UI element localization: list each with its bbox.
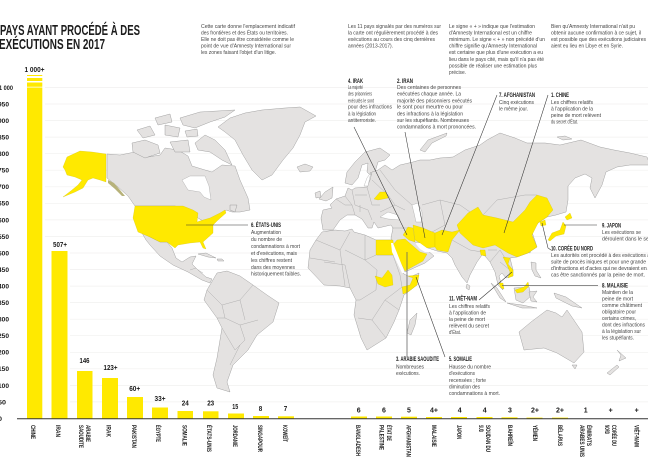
leader: 6 États-Unis [186,224,248,226]
text block: plus sign explanation: précise. [449,70,466,76]
chart: country labels: IRAK [105,425,111,438]
callout: 1 Chine: du secret d'État. [551,118,578,126]
chart: bar values: 507+ [53,242,67,249]
leader: 2 Iran [405,132,425,238]
callout: 11 Viêt-Nam: Les chiffres relatifs [449,304,490,310]
callout: 2 Iran: 2. IRAN [397,79,413,85]
callout: 5 Somalie: d'exécutions [449,371,475,377]
chart: bar values: 23 [207,401,214,408]
leader: 5 Somalie [416,277,445,357]
callout: 2 Iran: majorité des prisonniers exécutés [397,98,472,104]
callout: 11 Viêt-Nam: la peine de mort [449,317,486,323]
chart: bar values [24,67,639,415]
leader: 11 Viêt-Nam [479,272,512,300]
callout: 5 Somalie: recensées ; forte [449,378,486,384]
chart: country labels: IRAN [54,425,60,437]
bar: Égypte [152,408,168,418]
callout: 8 Malaisie: 8. MALAISIE [602,284,628,290]
chart: country labels: NORD [603,425,609,434]
callout: 10 Corée du Nord: suite de procès iniques et pour une grande [551,260,646,266]
bar: Bélarus [552,417,568,420]
bar: Soudan du Sud [476,417,492,418]
bar: Yémen [526,417,542,420]
bar: Bangladesh [351,416,367,418]
text block: Libya and Syria: aient eu lieu en Libye et en Syrie. [551,44,623,50]
callout: 6 États-Unis: condamnations à mort [251,244,301,250]
callout: 1 Chine: à l'application de la [551,106,593,112]
callout: 8 Malaisie: obligatoire pour [602,310,636,316]
callout: 8 Malaisie: à la législation sur [602,329,641,335]
callout: 5 Somalie: condamnations à mort. [449,391,500,397]
callout: 1 Chine: peine de mort relèvent [551,113,602,119]
callout: 7 Afghanistan: 7. AFGHANISTAN [499,93,535,99]
chart: bar values: 7 [284,406,287,413]
text block: Libya and Syria: Bien qu'Amnesty International n'ait pu [551,24,635,30]
text block: plus sign explanation: est certaine que plus d'une exécution a eu [449,50,543,56]
chart: bar values: 33+ [154,396,166,403]
bar: Pakistan [127,397,143,418]
callout: 6 États-Unis [251,221,301,278]
callout: 5 Somalie: 5. SOMALIE [449,357,472,363]
text block: plus sign explanation: Le signe « + » indique que l'estimation [449,24,535,30]
callout: 11 Viêt-Nam: à l'application de [449,311,486,317]
chart: bar values: 123+ [104,365,118,372]
chart: bar values: 6 [357,408,361,415]
callout: 6 États-Unis: les chiffres restent [251,258,293,264]
yellow countries [63,151,572,294]
bar: Chine [27,75,42,418]
chart: bar values: + [609,408,613,415]
callout: 9 Japon [602,224,648,242]
callout: 9 Japon: Les exécutions se [602,230,641,236]
chart: bar values: 6 [382,408,386,415]
leader: 1 Chine [504,95,548,233]
callout: 4 Irak: antiterroriste. [348,118,376,124]
chart: bar values: 3 [508,408,512,415]
chart: bar values: 15 [232,404,238,411]
title [0,22,140,53]
callout: 7 Afghanistan [499,93,535,112]
country: Bélarus [374,192,388,200]
callout: 4 Irak: pour des infractions [348,105,392,111]
text block: Libya and Syria: est possible que des exécutions judiciaires [551,37,646,43]
callout: 2 Iran [397,79,476,130]
title: EXÉCUTIONS EN 2017 [0,36,105,53]
country: Malaisie orientale [515,282,529,293]
country: États-Unis [133,206,226,249]
callout: 10 Corée du Nord [551,245,648,278]
callout: 11 Viêt-Nam: 11. VIÊT-NAM [449,295,477,303]
text block: 11 countries: exécutions au cours des cinq dernières [348,37,435,43]
chart: country labels: AFGHANISTAN [405,425,411,457]
country: Malaisie péninsulaire [499,283,504,289]
callout: 8 Malaisie [602,284,645,342]
chart: country labels: PAKISTAN [130,425,136,448]
bar: Iran [52,251,68,418]
text block: plus sign explanation: minimum. Le signe « + » non précédé d'un [449,37,545,43]
text block: 11 countries: années (2013-2017). [348,44,393,50]
chart: country labels: SOUDAN DU [484,425,490,452]
country: Arabie saoudite et Yémen [392,239,427,271]
callout: 2 Iran: exécutées chaque année. La [397,92,461,98]
chart: country labels: ARABIE [84,425,90,442]
callout: 2 Iran: Des centaines de personnes [397,85,461,91]
chart: bar values: + [635,408,639,415]
text block: map disclaimer: des frontières et des États ou territoires. [201,30,288,37]
chart: country labels: BAHREÏN [506,425,513,446]
chart: bar values: 2+ [556,408,564,415]
callout: 6 États-Unis: 6. ÉTATS-UNIS [251,221,281,229]
callout: 1 Chine: 1. CHINE [551,93,569,99]
callout: 8 Malaisie: certains crimes, [602,316,636,322]
leader: 8 Malaisie [502,284,598,286]
text block: plus sign explanation: d'Amnesty International est un chiffre [449,31,532,37]
text block: Libya and Syria: obtenir aucune confirmation à ce sujet, il [551,31,641,37]
country: Égypte [376,240,394,255]
bar: Jordanie [228,414,244,418]
bar: Malaisie [426,417,442,418]
country: Iran [413,225,435,248]
country: Alaska [63,151,106,197]
leader: 3 Arabie saoudite [406,252,408,357]
chart: bar values: 4 [458,408,462,415]
country: Irak [403,227,415,242]
bar: État de Palestine [376,416,392,418]
country: Corée du Nord [540,220,546,226]
text block: 11 countries: la carte ont régulièrement procédé à des [348,31,438,37]
callout: 5 Somalie [449,357,500,397]
leader: 7 Afghanistan [442,95,497,235]
callout: 10 Corée du Nord: 10. CORÉE DU NORD [551,245,593,253]
chart: country labels: ARABES UNIS [578,425,584,457]
callout: 4 Irak [348,79,392,124]
callout: 4 Irak: exécutés le sont [348,98,374,104]
callout: 8 Malaisie: Maintien de la [602,290,633,296]
chart: bar values: 2+ [531,408,539,415]
country: Chine [457,195,553,257]
callout: 8 Malaisie: les stupéfiants. [602,336,634,342]
country: Japon [548,222,566,241]
chart: country labels: KOWEÏT [281,425,288,442]
chart: country labels: BANGLADESH [354,425,360,456]
bar: Afghanistan [401,417,417,418]
bar: Japon [451,417,467,418]
bar: États-Unis [203,411,218,418]
text block: plus sign explanation: chiffre signifie qu'Amnesty International [449,44,537,50]
text block: plus sign explanation: lieu dans le pays cité, mais qu'il n'a pas été [449,57,544,63]
chart: country labels: ÉTAT DE [385,425,393,441]
country: Bangladesh [480,250,486,256]
callout: 8 Malaisie: peine de mort [602,297,634,303]
callout: 4 Irak: à la législation [348,111,376,117]
text block: plus sign explanation: possible de réaliser une estimation plus [449,63,537,69]
text block: map disclaimer: point de vue d'Amnesty International sur [201,44,291,50]
persian gulf and red sea [391,243,430,273]
callout: 6 États-Unis: et d'exécutions, mais [251,251,297,257]
callout: 1 Chine [551,93,602,126]
chart: country labels: CHINE [29,425,35,439]
country borders [190,170,537,365]
bar: Somalie [178,411,193,418]
chart: y axis labels [0,85,13,423]
callout: 3 Arabie saoudite: exécutions. [396,371,420,377]
bar: Singapour [253,416,269,418]
chart: country labels: JAPON [455,425,461,439]
callout: 11 Viêt-Nam: d'État. [449,329,461,336]
bar: Irak [102,378,118,418]
callout: 9 Japon: 9. JAPON [602,224,621,230]
chart baseline [17,418,648,420]
leader: 9 Japon [564,224,597,226]
bar: Bahreïn [502,417,518,418]
callout: 3 Arabie saoudite: 3. ARABIE SAOUDITE [396,357,439,363]
callout: 2 Iran: condamnations à mort prononcées. [397,124,476,130]
chart: bar values: 4 [483,408,487,415]
chart: country labels: ÉMIRATS [585,425,593,446]
callout: 8 Malaisie: dont des infractions [602,323,645,329]
chart: bar values: 4+ [430,408,438,415]
country: Soudan du Sud [375,270,393,287]
chart: bar values: 1 000+ [24,67,44,74]
callout: 8 Malaisie: comme châtiment [602,303,643,309]
leader: 4 Irak [354,127,407,235]
chart: country labels: JORDANIE [231,425,237,447]
text block: 11 countries [348,24,441,50]
chart: country labels: ÉTATS-UNIS [205,425,213,452]
country: Somalie [402,275,419,294]
callout: 3 Arabie saoudite [396,357,439,377]
coastal strip: Alaska panhandle [108,180,125,196]
bar: Koweït [278,416,294,418]
leader: 10 Corée du Nord [542,223,551,250]
chart: bar values: 146 [80,358,90,365]
callout: 7 Afghanistan: Cinq exécutions [499,100,534,106]
country: Japon, Hokkaido [565,213,572,220]
callout: 1 Chine: Les chiffres relatifs [551,100,593,106]
callout: 4 Irak: des prisonniers [348,92,372,98]
country: Afghanistan et Pakistan [435,230,460,252]
text block: map disclaimer: Cette carte donne l'emplacement indicatif [201,24,296,30]
text block: plus sign explanation [449,24,545,76]
title: PAYS AYANT PROCÉDÉ À DES [0,22,140,39]
callout: 4 Irak: La majorité [348,85,363,91]
chart: country labels: SUD [477,425,483,432]
callout: 5 Somalie: diminution des [449,384,480,390]
chart: country labels: MALAISIE [430,425,436,447]
chart: country labels: VIÊT-NAM [633,425,641,447]
bar chart: executions per country [27,75,568,418]
chart: bar values: 8 [259,406,262,413]
chart: country labels: SOMALIE [181,425,187,446]
chart: country labels: SAOUDITE [77,425,83,448]
text block: map disclaimer [201,24,296,56]
callout: 6 États-Unis: historiquement faibles. [251,272,301,278]
callout: 10 Corée du Nord: cas être sanctionnés par la peine de mort. [551,272,645,278]
chart: country labels [29,425,641,457]
callout: 5 Somalie: Hausse du nombre [449,365,491,371]
chart: bar values: 24 [182,401,189,408]
chart: country labels: PALESTINE [378,425,384,450]
text block: Libya and Syria [551,24,646,50]
callout: 2 Iran: des infractions à la législation [397,111,463,117]
chart: bar values: 5 [407,408,411,415]
chart: country labels: SINGAPOUR [256,425,262,452]
chart: country labels: BÉLARUS [556,425,564,446]
hudson bay, black sea, caspian and baltic water [182,172,422,222]
callout: 6 États-Unis: Augmentation [251,230,281,236]
bar: Arabie saoudite [77,371,92,418]
callout: 6 États-Unis: du nombre de [251,237,282,243]
country: Viêt-Nam [503,257,513,278]
world map [63,95,648,392]
text block: map disclaimer: Elle ne doit pas être considérée comme le [201,37,294,43]
callout: 3 Arabie saoudite: Nombreuses [396,365,424,371]
callout: 11 Viêt-Nam [449,295,490,336]
chart: bar values: 1 [584,408,588,415]
callout: 7 Afghanistan: le même jour. [499,106,528,112]
callout: 4 Irak: 4. IRAK [348,79,363,85]
text block: 11 countries: Les 11 pays signalés par des numéros sur [348,24,441,30]
text block: map disclaimer: les zones faisant l'objet d'un litige. [201,50,276,56]
callout: 2 Iran: le sont pour meurtre ou pour [397,105,463,111]
chart: country labels: CORÉE DU [610,425,618,446]
callout: 11 Viêt-Nam: relèvent du secret [449,324,490,330]
land: grey countries [107,107,648,392]
chart: country labels: YÉMEN [531,425,539,441]
callout: 6 États-Unis: dans des moyennes [251,265,295,271]
chart: country labels: ÉGYPTE [154,425,162,442]
chart: bar values: 60+ [129,386,140,393]
callout: 2 Iran: sur les stupéfiants. Nombreuses [397,118,469,124]
